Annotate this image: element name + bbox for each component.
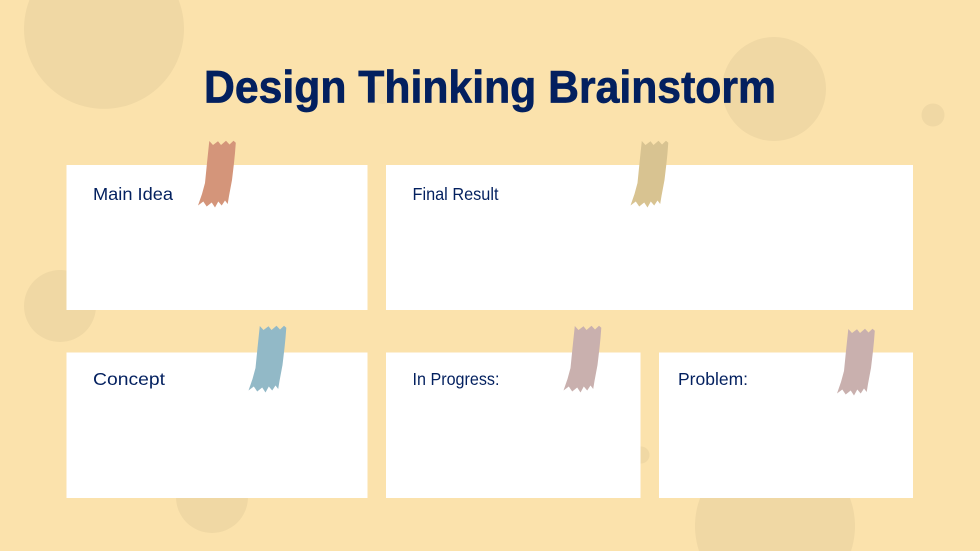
title: Design Thinking Brainstorm	[204, 62, 776, 112]
label: concept: Concept	[93, 369, 165, 389]
panel: main idea	[66, 165, 368, 310]
panel: in progress	[386, 352, 640, 498]
panel: final result	[386, 165, 913, 310]
panel: problem	[659, 352, 913, 498]
tape: concept	[248, 326, 286, 392]
label: problem: Problem:	[678, 369, 748, 389]
label: in progress: In Progress:	[412, 369, 500, 389]
tape: problem	[837, 329, 875, 396]
tape: main idea	[198, 141, 236, 208]
tape: in progress	[564, 326, 601, 392]
label: final result: Final Result	[412, 184, 499, 204]
panel: concept	[66, 352, 368, 498]
tape: final result	[630, 141, 668, 208]
label: main idea: Main Idea	[93, 184, 173, 204]
